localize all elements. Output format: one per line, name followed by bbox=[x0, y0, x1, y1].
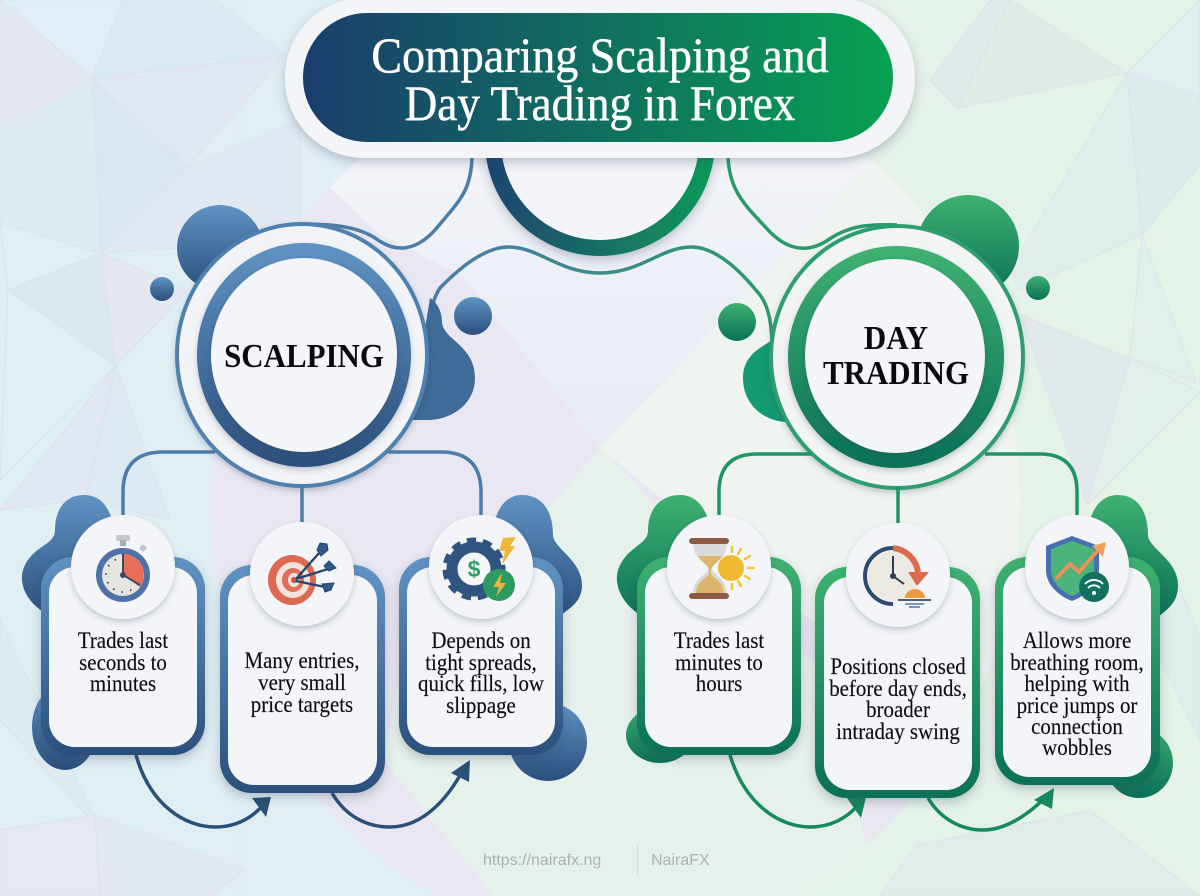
arrow: day card 1 to 2 bbox=[730, 755, 866, 827]
card: allows more breathing room: breathing room, bbox=[1010, 649, 1144, 675]
icon: shield, arrow and wifi bbox=[1046, 536, 1109, 602]
card: trades last minutes to hours: hours bbox=[696, 670, 742, 696]
panel: day trading main circle: TRADING bbox=[823, 355, 969, 392]
blobs behind scalping cards bbox=[22, 495, 587, 781]
panel: scalping main circle: SCALPING bbox=[224, 338, 384, 375]
connector lines from title bbox=[302, 150, 897, 400]
card: trades last seconds to minutes: minutes bbox=[90, 670, 156, 696]
panel: day trading main circle bbox=[718, 195, 1050, 488]
icon: stopwatch bbox=[96, 535, 150, 602]
card: depends on tight spreads: quick fills, low bbox=[418, 670, 544, 696]
card: trades last seconds to minutes: seconds to bbox=[79, 649, 167, 675]
card: trades last seconds to minutes bbox=[41, 515, 205, 755]
card: positions closed: Positions closed bbox=[830, 653, 966, 679]
icon: target with arrows bbox=[268, 543, 336, 605]
day trading branch lines bbox=[719, 454, 1077, 525]
panel: scalping main circle bbox=[150, 205, 492, 486]
card: depends on tight spreads: tight spreads, bbox=[425, 649, 537, 675]
card: allows more breathing room: wobbles bbox=[1042, 734, 1112, 760]
card: trades last minutes to hours: Trades last bbox=[674, 627, 764, 653]
arrow: day card 2 to 3 bbox=[928, 788, 1054, 830]
card: depends on tight spreads bbox=[399, 515, 563, 755]
blobs behind day trading cards bbox=[617, 495, 1178, 798]
card: allows more breathing room: connection bbox=[1031, 713, 1123, 739]
icon: hourglass and sun bbox=[689, 538, 754, 599]
card: depends on tight spreads: slippage bbox=[446, 692, 516, 718]
card: trades last minutes to hours bbox=[637, 515, 801, 755]
icon: gear and bolts bbox=[446, 537, 516, 601]
footer: NairaFX bbox=[651, 852, 710, 869]
panel: day trading main circle: DAY bbox=[864, 320, 928, 357]
arrow: scalping card 2 to 3 bbox=[332, 760, 470, 827]
card: positions closed: broader bbox=[866, 696, 931, 722]
icon: clock and sunset bbox=[865, 548, 931, 607]
card: trades last minutes to hours: minutes to bbox=[675, 649, 763, 675]
card: allows more breathing room bbox=[995, 515, 1160, 785]
card: allows more breathing room: helping with bbox=[1024, 670, 1130, 696]
card: many entries: Many entries, bbox=[245, 647, 359, 673]
card: many entries: price targets bbox=[251, 691, 353, 717]
title banner: Day Trading in Forex bbox=[405, 77, 796, 132]
title banner: Comparing Scalping and bbox=[371, 28, 829, 83]
card: positions closed bbox=[815, 523, 980, 798]
hanging half circle bbox=[485, 26, 715, 256]
footer bbox=[483, 845, 710, 875]
icon: gear and bolts: $ bbox=[468, 556, 481, 582]
card: positions closed: intraday swing bbox=[836, 718, 960, 744]
card: allows more breathing room: price jumps or bbox=[1017, 692, 1138, 718]
card: depends on tight spreads: Depends on bbox=[431, 627, 531, 653]
card: many entries: very small bbox=[258, 669, 346, 695]
card: many entries bbox=[220, 522, 385, 793]
card: trades last seconds to minutes: Trades last bbox=[78, 627, 168, 653]
card: positions closed: before day ends, bbox=[829, 675, 967, 701]
arrow: scalping card 1 to 2 bbox=[136, 755, 271, 827]
card: allows more breathing room: Allows more bbox=[1023, 627, 1131, 653]
scalping branch lines bbox=[123, 452, 481, 525]
footer: https://nairafx.ng bbox=[483, 852, 601, 869]
title banner bbox=[285, 0, 915, 158]
